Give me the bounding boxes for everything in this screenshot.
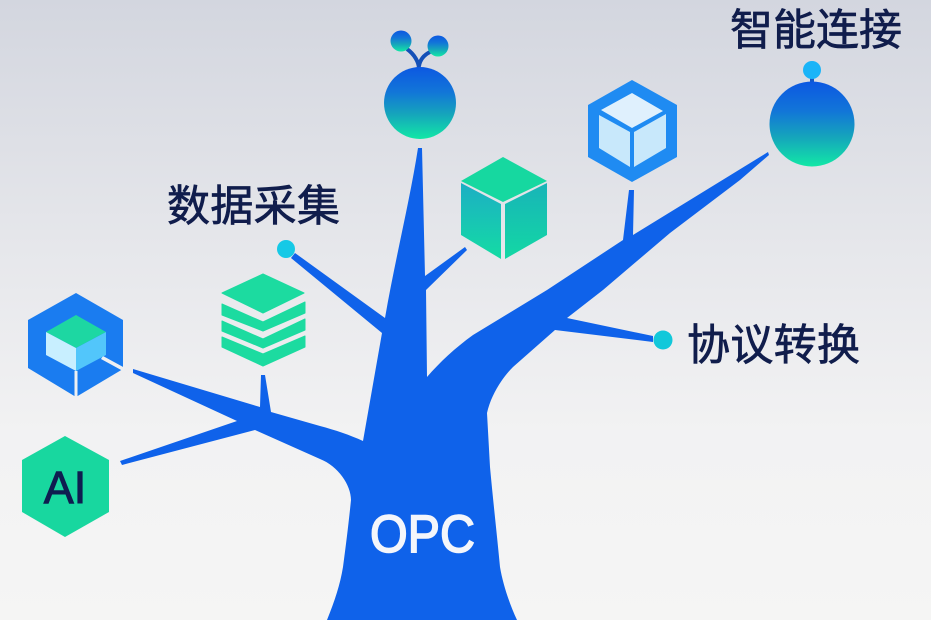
dot: protocol node xyxy=(654,330,672,350)
label: AI: AI xyxy=(44,462,86,513)
label: 智能连接: 智能连接 xyxy=(730,7,902,55)
tree silhouette xyxy=(120,148,769,620)
icon: sprout sphere xyxy=(384,30,456,139)
icon: blue hexagon with light cube xyxy=(588,80,677,182)
icon: blue hexagon with cube xyxy=(28,293,125,398)
icon: AI hexagon xyxy=(22,436,109,537)
label: OPC: OPC xyxy=(370,505,475,564)
dot: data collection node xyxy=(277,240,295,258)
label: 协议转换: 协议转换 xyxy=(687,322,860,370)
icon: green cube xyxy=(461,157,547,259)
icon: large sphere with node xyxy=(770,61,854,166)
label: 数据采集: 数据采集 xyxy=(167,183,340,231)
icon: stacked layers xyxy=(222,274,305,366)
